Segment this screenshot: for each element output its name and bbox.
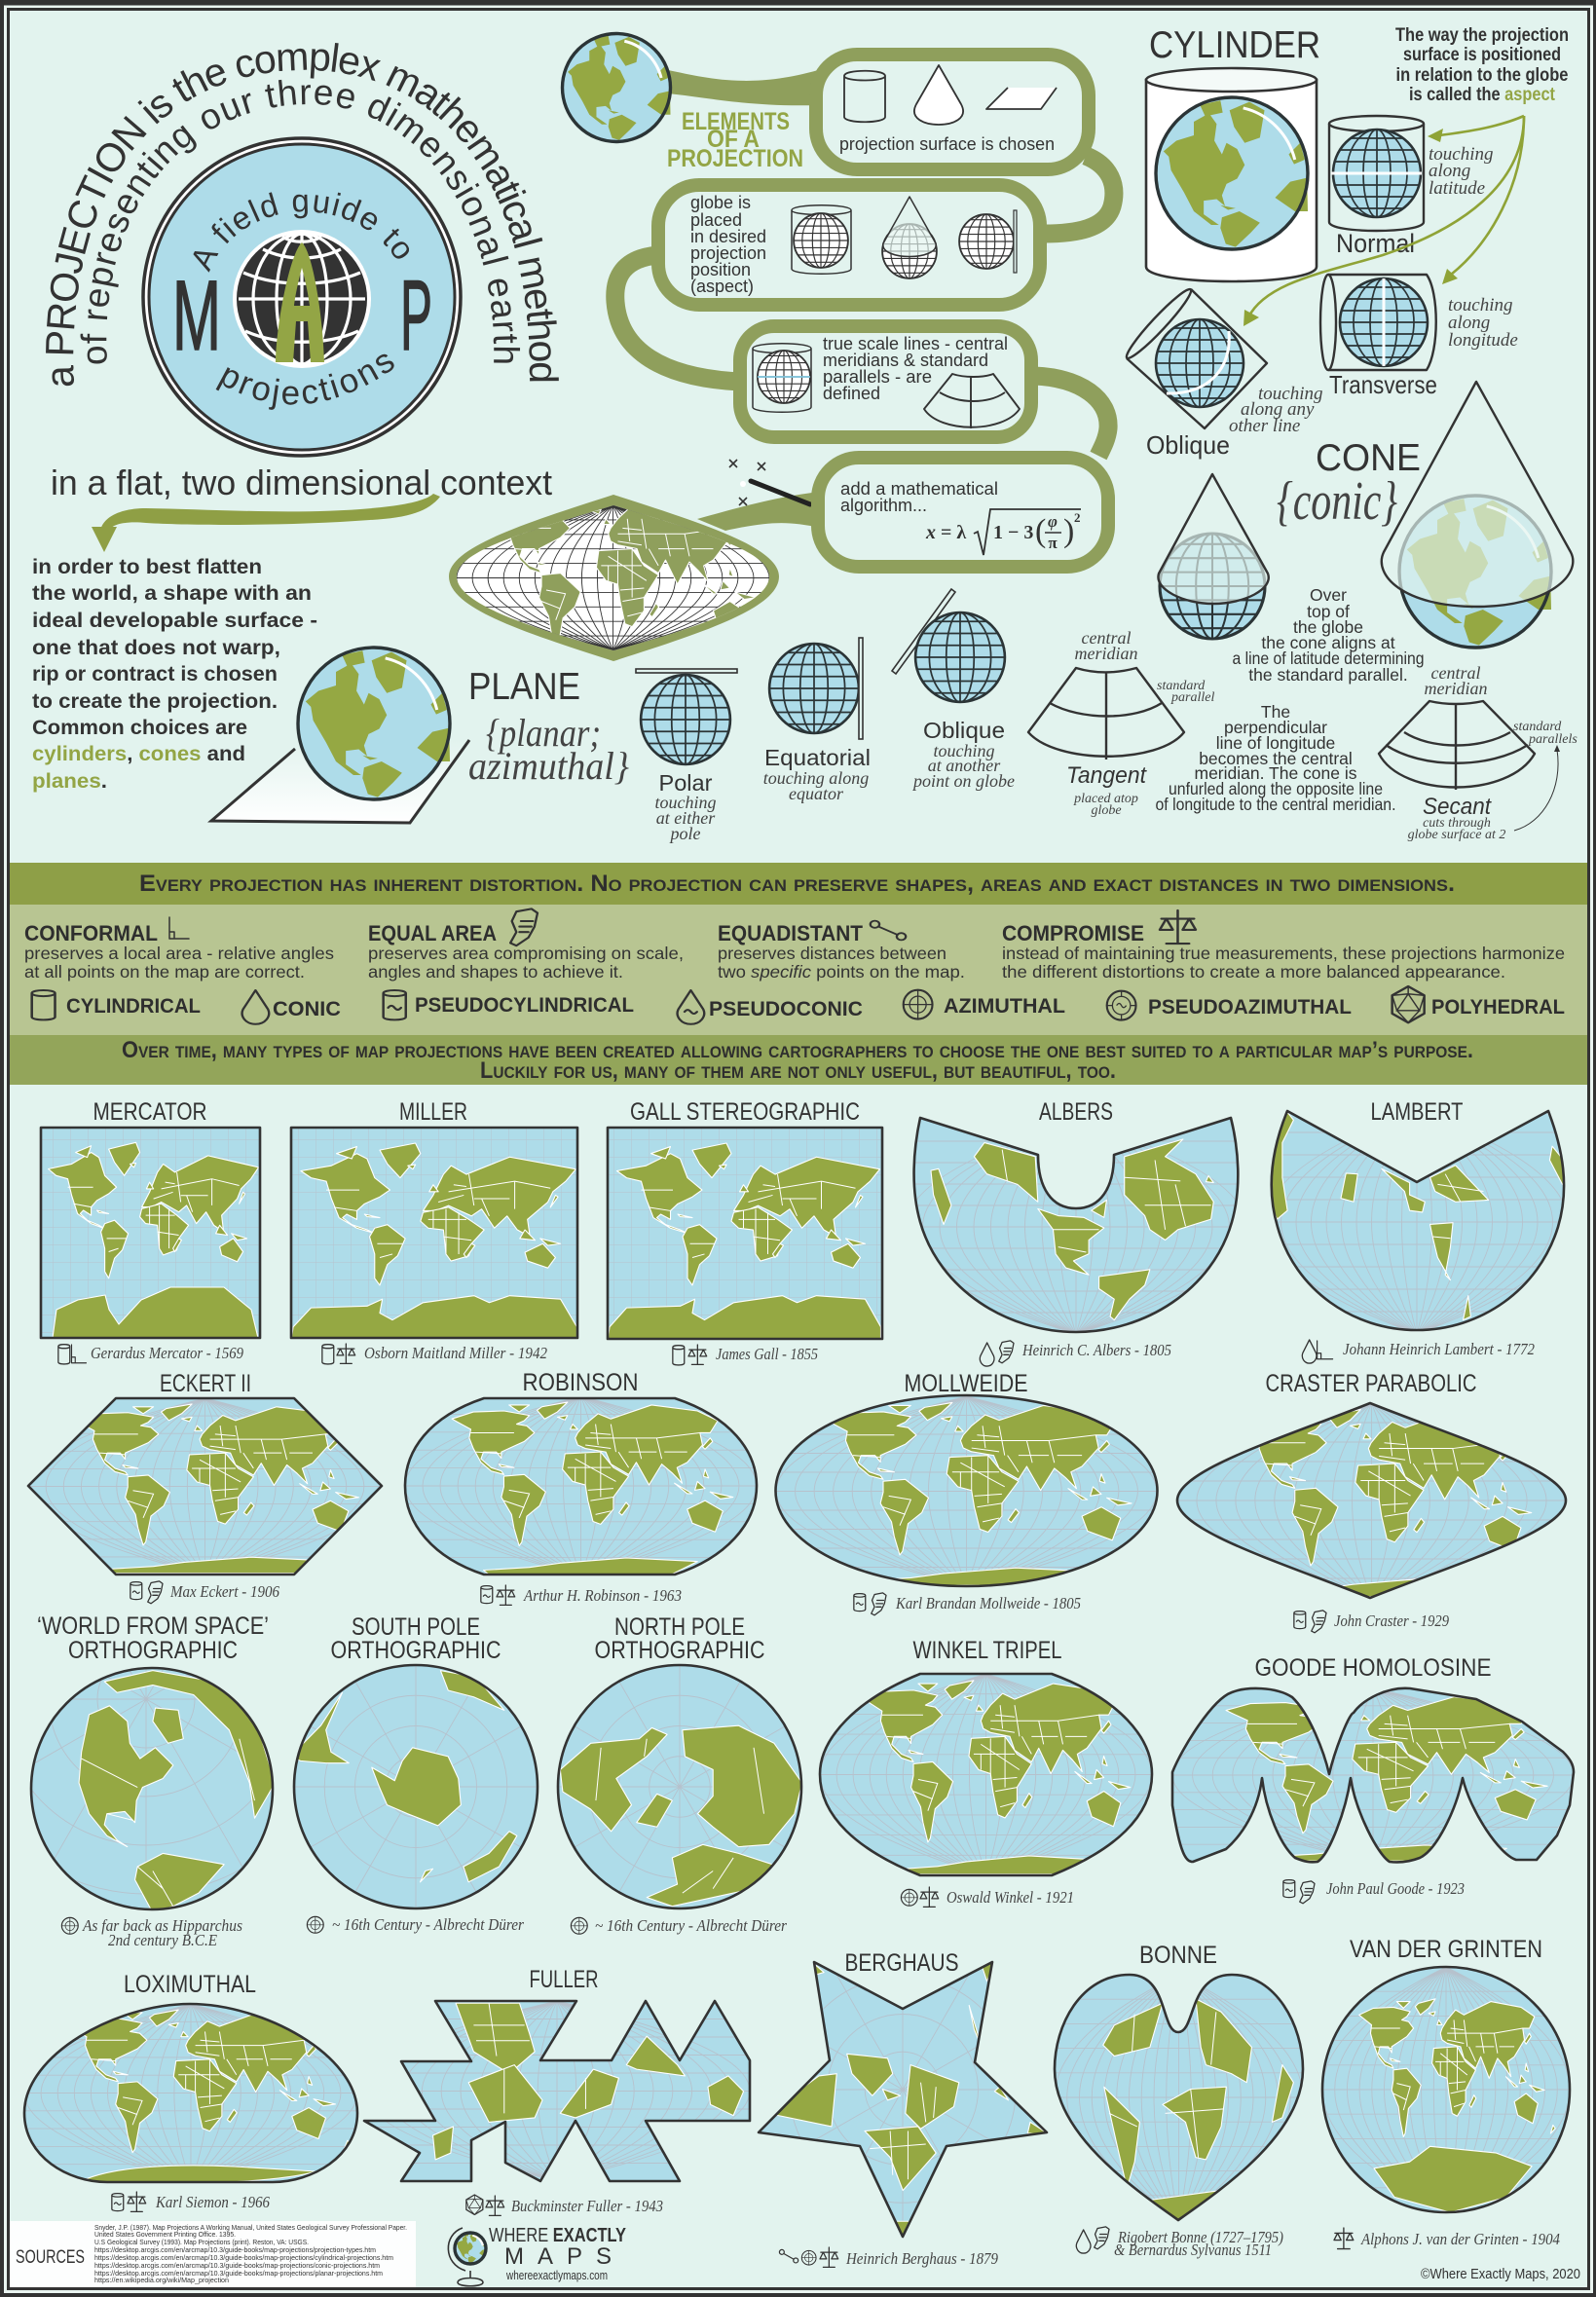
map: Mollweide: Karl Brandan Mollweide - 1805: [895, 1594, 1081, 1612]
cylinder aspect: oblique: along any: [1241, 399, 1315, 420]
equal area: preserves area compromising on scale,: [368, 944, 684, 963]
heading: plane: {planar;: [486, 711, 601, 755]
cylinder aspect: transverse: touching: [1448, 295, 1513, 315]
map: Berghaus: Heinrich Berghaus - 1879: [845, 2249, 998, 2268]
map: Goode homolosine: [1172, 1654, 1574, 1904]
subtitle: in a flat, two dimensional context: [51, 463, 552, 502]
cone type: tangent: parallel: [1170, 690, 1214, 705]
map: Fuller: [364, 1966, 750, 2215]
equal area: angles and shapes to achieve it.: [368, 962, 623, 982]
formula: (: [1035, 513, 1046, 549]
map: Albers: ALBERS: [1039, 1098, 1113, 1126]
cylinder aspect: oblique: touching: [1258, 384, 1322, 404]
text: why a developable surface: to create the projection.: [32, 690, 278, 713]
map: world from space orthographic: [29, 1616, 275, 1949]
heading: elements of a projection: OF A: [707, 126, 760, 153]
globe: start of flow: [563, 33, 670, 142]
text: why a developable surface: Common choices are: [32, 717, 247, 739]
wand and sparkles: [729, 460, 810, 505]
cylinder aspect: oblique: Oblique: [1146, 430, 1230, 460]
band: distortion types and surfaces: [10, 905, 1587, 1035]
formula: [925, 509, 1081, 555]
cylinder aspect: normal: latitude: [1429, 178, 1485, 199]
heading: plane: azimuthal}: [468, 744, 629, 788]
step 3: true scale lines: defined: [823, 384, 880, 403]
azimuthal: AZIMUTHAL: [944, 995, 1065, 1018]
map: Albers: [906, 1098, 1246, 1366]
band: many types: Luckily for us, many of them are not only useful, but beautiful, too.: [480, 1057, 1116, 1084]
step 2: globe placed: position: [690, 260, 751, 279]
plane aspect: oblique: Oblique: [923, 718, 1005, 743]
badge: a field guide to map projections: projections: [216, 354, 394, 410]
pseudoazimuthal: PSEUDOAZIMUTHAL: [1148, 996, 1352, 1019]
step 2: globe placed: projection: [690, 243, 766, 263]
map: Bonne: BONNE: [1139, 1942, 1217, 1969]
pseudocylindrical: [384, 990, 634, 1019]
step 3: true scale lines: [740, 326, 1031, 437]
step 1: projection surface: [816, 55, 1089, 169]
projected world lens map: [449, 495, 779, 661]
map: north pole orthographic: [558, 1613, 802, 1935]
plane aspect: polar: Polar: [658, 770, 713, 796]
plane aspect: oblique: [892, 589, 1015, 791]
cone type: secant: Secant: [1423, 794, 1492, 820]
plane aspect: polar: at either: [656, 808, 716, 828]
text: perpendicular line of longitude: line of longitude: [1216, 733, 1335, 753]
plane aspect: polar: pole: [668, 824, 701, 843]
band: inherent distortion: [10, 863, 1587, 905]
conic: [242, 990, 341, 1024]
badge: a field guide to map projections: M: [172, 260, 221, 371]
heading: cone: CONE: [1316, 437, 1421, 479]
conformal: at all points on the map are correct.: [24, 962, 305, 982]
formula: 2: [1074, 510, 1081, 525]
cylindrical: CYLINDRICAL: [66, 995, 201, 1018]
cone type: tangent: placed atop: [1073, 792, 1138, 806]
map: Bonne: & Bernardus Sylvanus 1511: [1114, 2241, 1272, 2259]
map: Berghaus: BERGHAUS: [845, 1949, 958, 1977]
step 4: mathematical algorithm: algorithm...: [840, 496, 927, 515]
sources: U.S Geological Survey (1993). Map Projections (print). Reston, VA: USGS.: [94, 2238, 309, 2246]
cylinder aspect: normal: along: [1429, 161, 1470, 181]
map: Bonne: [1055, 1942, 1303, 2259]
map: Robinson: [405, 1369, 757, 1605]
big cylinder with globe: [1146, 68, 1317, 281]
cone type: tangent: Tangent: [1066, 762, 1147, 789]
formula: 1 − 3: [993, 522, 1033, 543]
flow: elements of a projection snake connectors: [615, 70, 1114, 531]
map: Van der Grinten: VAN DER GRINTEN: [1350, 1936, 1542, 1963]
map: Mollweide: [775, 1370, 1157, 1615]
map: Fuller: FULLER: [530, 1966, 598, 1993]
big cone with globe: [1382, 382, 1573, 648]
polyhedral: POLYHEDRAL: [1431, 996, 1565, 1019]
badge: a field guide to map projections: P: [400, 260, 432, 371]
conformal: preserves a local area - relative angles: [24, 944, 334, 963]
cylinder aspect: transverse: along: [1448, 313, 1490, 333]
map: Craster parabolic: [1177, 1370, 1566, 1633]
sources: https://en.wikipedia.org/wiki/Map_projection: [94, 2276, 229, 2284]
pseudoazimuthal: [1107, 991, 1352, 1020]
compromise: the different distortions to create a more balanced appearance.: [1002, 962, 1505, 982]
sources: United States Government Printing Office. 1395.: [94, 2230, 236, 2239]
heading: elements of a projection: [667, 108, 803, 172]
text: why a developable surface: in order to best flatten: [32, 556, 262, 578]
text: why a developable surface: [32, 556, 317, 793]
text: why a developable surface: rip or contract is chosen: [32, 663, 278, 685]
cone type: secant: cuts through: [1423, 816, 1491, 831]
cylinder aspect: normal: Normal: [1336, 229, 1415, 258]
step 2: globe placed: globe is: [690, 193, 751, 212]
map: Eckert II: ECKERT II: [160, 1370, 251, 1397]
heading: elements of a projection: ELEMENTS: [682, 108, 790, 135]
cone type: secant: standard: [1513, 720, 1562, 734]
sources: [10, 2221, 416, 2287]
cylinder aspect: normal: [1329, 116, 1494, 258]
map: Winkel tripel: Oswald Winkel - 1921: [946, 1888, 1074, 1907]
heading: cylinder: CYLINDER: [1149, 24, 1320, 66]
pseudoconic: [678, 990, 863, 1024]
map: Loximuthal: [24, 1971, 357, 2211]
logo: where exactly maps: WHERE EXACTLY: [489, 2225, 627, 2246]
sources: https://desktop.arcgis.com/en/arcmap/10.3/guide-books/map-projections/planar-projections.htm: [94, 2269, 383, 2278]
plane aspect: equatorial: touching along: [763, 768, 869, 788]
title: arc text outer line: a PROJECTION is the complex mathematical method: [46, 43, 559, 386]
text: over top of the globe: the standard parallel.: [1248, 665, 1408, 685]
sources: https://desktop.arcgis.com/en/arcmap/10.3/guide-books/map-projections/cylindrical-projections.htm: [94, 2253, 393, 2262]
map: Miller: [291, 1098, 577, 1364]
formula: ): [1063, 513, 1074, 549]
map: Goode homolosine: John Paul Goode - 1923: [1326, 1879, 1465, 1898]
map: south pole orthographic: SOUTH POLE: [352, 1613, 480, 1641]
equal area: [368, 908, 684, 982]
map: world from space orthographic: ORTHOGRAPHIC: [68, 1637, 238, 1664]
text: perpendicular line of longitude: of longitude to the central meridian.: [1155, 795, 1396, 814]
text: perpendicular line of longitude: [1155, 702, 1396, 814]
text: over top of the globe: top of: [1307, 602, 1350, 621]
map: Bonne: Rigobert Bonne (1727–1795): [1117, 2228, 1283, 2246]
map: Mercator: [41, 1098, 260, 1364]
text: over top of the globe: a line of latitude determining: [1233, 648, 1424, 668]
step 1: projection surface: projection surface is chosen: [839, 134, 1055, 154]
map: world from space orthographic: ‘WORLD FROM SPACE’: [37, 1612, 269, 1640]
text: aspect definition: [1395, 25, 1569, 105]
compromise: [1002, 910, 1565, 982]
equadistant: [718, 921, 965, 982]
cylinder aspect: transverse: [1320, 275, 1518, 399]
text: aspect definition: surface is positioned: [1403, 45, 1561, 65]
text: why a developable surface: ideal developable surface -: [32, 610, 317, 632]
formula: x = λ: [925, 522, 966, 543]
band: many types: Over time, many types of map projections have been created allowing cartographers to choose the one best suited to a particular map’s purpose.: [122, 1037, 1473, 1063]
map: Robinson: Arthur H. Robinson - 1963: [523, 1586, 682, 1605]
text: perpendicular line of longitude: perpendicular: [1224, 718, 1327, 737]
map: Lambert: LAMBERT: [1371, 1098, 1463, 1126]
map: Berghaus: [752, 1939, 1054, 2268]
logo: where exactly maps: whereexactlymaps.com: [505, 2269, 608, 2282]
plane aspect: polar: [636, 669, 737, 843]
text: perpendicular line of longitude: becomes the central: [1199, 749, 1353, 768]
arrow: down to paragraph: [92, 494, 440, 552]
polyhedral: [1392, 986, 1565, 1022]
text: aspect definition: The way the projection: [1395, 25, 1569, 46]
cone type: secant: meridian: [1424, 679, 1488, 698]
plane aspect: oblique: point on globe: [911, 771, 1015, 791]
text: over top of the globe: the globe: [1293, 617, 1363, 637]
title: arc text inner line: of representing our three dimensional earth: [80, 80, 520, 364]
cone type: tangent: [1028, 628, 1214, 818]
step 2: globe placed: in desired: [690, 227, 766, 246]
formula: φ: [1048, 512, 1058, 531]
azimuthal: [904, 990, 1065, 1019]
compromise: instead of maintaining true measurements, these projections harmonize: [1002, 944, 1565, 963]
badge: a field guide to map projections: [141, 136, 463, 458]
sources: https://desktop.arcgis.com/en/arcmap/10.3/guide-books/map-projections/projection-types.htm: [94, 2245, 376, 2254]
text: why a developable surface: cylinders, cones and: [32, 743, 245, 765]
map: world from space orthographic: As far back as Hipparchus: [82, 1916, 242, 1935]
text: perpendicular line of longitude: The: [1261, 702, 1290, 722]
map: Van der Grinten: [1322, 1936, 1570, 2249]
map: Winkel tripel: [820, 1637, 1152, 1907]
plane aspect: polar: touching: [654, 793, 717, 812]
pseudoconic: PSEUDOCONIC: [709, 998, 863, 1020]
map: Mercator: Gerardus Mercator - 1569: [91, 1344, 243, 1362]
map: world from space orthographic: 2nd century B.C.E: [108, 1931, 217, 1949]
band: inherent distortion: Every projection has inherent distortion. No projection can preserve shapes, areas and exact distances in two dimensions.: [139, 871, 1455, 897]
map: south pole orthographic: [290, 1613, 538, 1934]
cone type: tangent: central: [1081, 628, 1132, 648]
step 3: true scale lines: true scale lines - central: [823, 334, 1008, 353]
aspect arrows: [1243, 116, 1524, 326]
text: aspect definition: in relation to the globe: [1396, 65, 1568, 86]
map: Craster parabolic: CRASTER PARABOLIC: [1266, 1370, 1476, 1397]
cone type: secant: parallels: [1528, 732, 1577, 747]
cone type: tangent: meridian: [1075, 644, 1137, 663]
map: north pole orthographic: ORTHOGRAPHIC: [594, 1637, 765, 1664]
map: Goode homolosine: GOODE HOMOLOSINE: [1254, 1654, 1492, 1682]
cylinder aspect: oblique: other line: [1229, 416, 1300, 436]
map: Miller: Osborn Maitland Miller - 1942: [364, 1344, 547, 1362]
step 4: mathematical algorithm: [818, 458, 1108, 567]
sources: Snyder, J.P. (1987). Map Projections A Working Manual, United States Geological Survey Professional Paper.: [94, 2223, 407, 2232]
map: Van der Grinten: Alphons J. van der Grinten - 1904: [1360, 2230, 1560, 2248]
plane aspect: oblique: touching: [933, 741, 995, 760]
logo: where exactly maps: [448, 2225, 627, 2286]
formula: π: [1048, 534, 1058, 552]
map: Albers: Heinrich C. Albers - 1805: [1021, 1341, 1171, 1359]
map: north pole orthographic: ~ 16th Century - Albrecht Dürer: [595, 1916, 788, 1935]
map: Eckert II: [28, 1370, 382, 1604]
conformal: [24, 917, 334, 982]
conformal: CONFORMAL: [24, 921, 158, 945]
map: Winkel tripel: WINKEL TRIPEL: [913, 1637, 1062, 1664]
cone type: tangent: globe: [1091, 803, 1122, 818]
map: Robinson: ROBINSON: [522, 1369, 639, 1396]
text: why a developable surface: the world, a shape with an: [32, 582, 312, 605]
cylinder aspect: oblique: [1122, 285, 1322, 460]
map: north pole orthographic: NORTH POLE: [614, 1613, 745, 1641]
compromise: COMPROMISE: [1002, 921, 1144, 945]
conic: CONIC: [273, 998, 341, 1020]
step 3: true scale lines: meridians & standard: [823, 351, 988, 370]
cylinder aspect: transverse: longitude: [1448, 330, 1518, 351]
equadistant: two specific points on the map.: [718, 962, 965, 982]
cone type: secant: central: [1431, 663, 1480, 683]
step 2: globe placed: [658, 185, 1040, 305]
text: perpendicular line of longitude: unfurled along the opposite line: [1169, 779, 1383, 798]
map: Lambert: [1257, 1098, 1577, 1363]
text: over top of the globe: [1233, 585, 1424, 685]
map: Mercator: MERCATOR: [93, 1098, 206, 1126]
map: Mollweide: MOLLWEIDE: [904, 1370, 1028, 1397]
map: south pole orthographic: ORTHOGRAPHIC: [331, 1637, 501, 1664]
pseudocylindrical: PSEUDOCYLINDRICAL: [415, 994, 634, 1017]
map: Fuller: Buckminster Fuller - 1943: [511, 2197, 663, 2215]
heading: plane: PLANE: [468, 666, 580, 708]
plane with globe: [211, 648, 469, 823]
text: aspect definition: is called the aspect: [1409, 85, 1556, 105]
cone type: secant: [1379, 663, 1577, 842]
text: over top of the globe: Over: [1310, 585, 1347, 605]
map: Gall stereographic: GALL STEREOGRAPHIC: [630, 1098, 860, 1126]
sources: SOURCES: [16, 2247, 85, 2268]
equadistant: EQUADISTANT: [718, 921, 864, 945]
equal area: EQUAL AREA: [368, 921, 497, 945]
step 2: globe placed: placed: [690, 210, 742, 230]
cone type: tangent: standard: [1157, 679, 1206, 693]
step 2: globe placed: (aspect): [690, 277, 754, 296]
step 4: mathematical algorithm: add a mathematical: [840, 479, 998, 499]
plane aspect: oblique: at another: [928, 756, 1001, 775]
equadistant: preserves distances between: [718, 944, 946, 963]
plane aspect: equatorial: [763, 638, 871, 803]
map: Gall stereographic: James Gall - 1855: [716, 1345, 818, 1363]
map: Gall stereographic: [608, 1098, 882, 1365]
map: Loximuthal: Karl Siemon - 1966: [155, 2193, 271, 2211]
sources: https://desktop.arcgis.com/en/arcmap/10.3/guide-books/map-projections/conic-projections.htm: [94, 2261, 380, 2270]
map: south pole orthographic: ~ 16th Century - Albrecht Dürer: [332, 1915, 525, 1934]
cone type: secant: globe surface at 2: [1408, 828, 1505, 842]
cylindrical: [32, 990, 201, 1019]
text: why a developable surface: one that does not warp,: [32, 637, 280, 659]
band: many types: [10, 1035, 1587, 1085]
heading: elements of a projection: PROJECTION: [667, 145, 803, 172]
text: perpendicular line of longitude: meridian. The cone is: [1194, 763, 1357, 783]
map: Miller: MILLER: [399, 1098, 467, 1126]
small cone with grid globe: [1158, 474, 1269, 639]
logo: where exactly maps: MAPS: [504, 2243, 612, 2270]
cylinder aspect: normal: touching: [1429, 144, 1494, 165]
cylinder aspect: transverse: Transverse: [1329, 370, 1437, 399]
plane aspect: equatorial: Equatorial: [764, 745, 871, 770]
heading: cone: {conic}: [1277, 471, 1397, 532]
map: Loximuthal: LOXIMUTHAL: [124, 1971, 256, 1998]
plane aspect: equatorial: equator: [789, 784, 844, 803]
map: Lambert: Johann Heinrich Lambert - 1772: [1343, 1340, 1535, 1358]
badge: a field guide to map projections: A field guide to: [193, 192, 409, 273]
heading: cone: [1277, 437, 1421, 532]
map: Eckert II: Max Eckert - 1906: [169, 1582, 280, 1601]
text: why a developable surface: planes.: [32, 770, 107, 793]
text: over top of the globe: the cone aligns at: [1261, 633, 1395, 652]
map: Craster parabolic: John Craster - 1929: [1334, 1612, 1449, 1630]
step 3: true scale lines: parallels - are: [823, 367, 932, 387]
heading: plane: [468, 666, 629, 788]
